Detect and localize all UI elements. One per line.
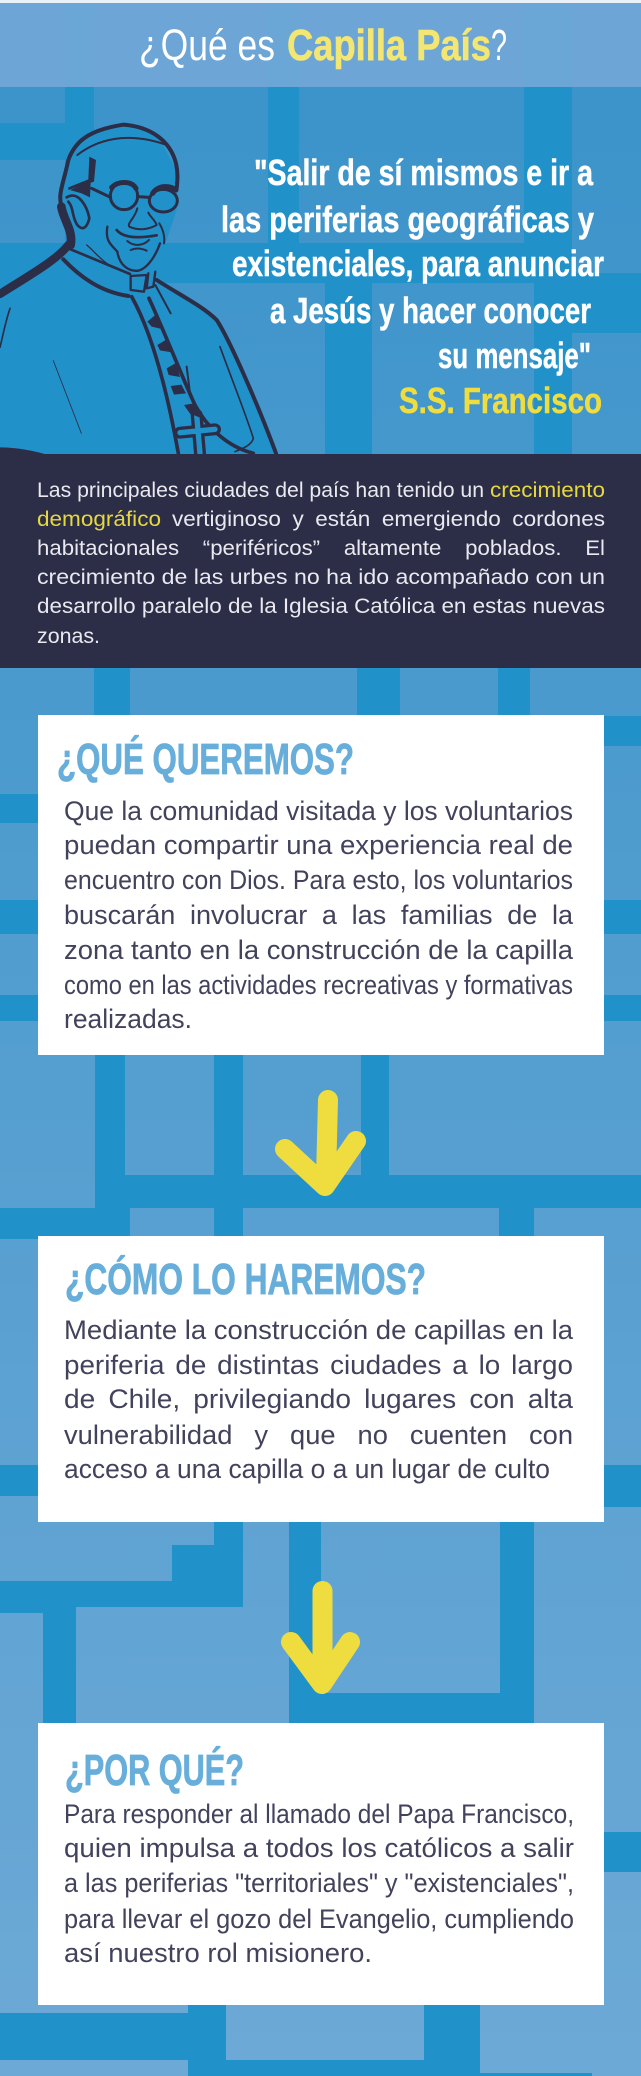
heading: ¿QUÉ QUEREMOS? xyxy=(57,734,354,784)
heading: ¿CÓMO LO HAREMOS? xyxy=(65,1254,426,1304)
body text xyxy=(64,796,573,1034)
body text xyxy=(64,1315,573,1484)
quote xyxy=(221,152,604,421)
arrow: down to por qué xyxy=(291,1591,350,1684)
body text: quien impulsa a todos los católicos a salir xyxy=(64,1833,574,1863)
illustration: Pope Francis portrait xyxy=(0,124,277,457)
body text: Para responder al llamado del Papa Francisco, xyxy=(64,1799,574,1829)
intro text: Las principales ciudades del país han tenido un xyxy=(37,478,484,502)
panel: qué queremos xyxy=(38,715,604,1055)
intro text: demográfico xyxy=(37,507,161,531)
intro text xyxy=(37,478,605,648)
body text: zona tanto en la construcción de la capilla xyxy=(64,935,573,965)
body text: puedan compartir una experiencia real de xyxy=(64,830,573,860)
body text: como en las actividades recreativas y formativas xyxy=(64,970,573,1000)
title: Capilla País xyxy=(287,21,491,70)
body text: realizadas. xyxy=(64,1004,192,1034)
intro text: zonas. xyxy=(37,624,100,648)
title: ? xyxy=(491,21,507,70)
panel: cómo lo haremos xyxy=(38,1236,604,1522)
arrow: down to cómo xyxy=(285,1100,356,1186)
body text: así nuestro rol misionero. xyxy=(64,1938,372,1968)
panel: intro dark band xyxy=(0,454,641,668)
body text: Mediante la construcción de capillas en la xyxy=(64,1315,573,1345)
title xyxy=(139,21,507,70)
body text: periferia de distintas ciudades a lo largo xyxy=(64,1350,573,1380)
body text xyxy=(64,1799,574,1968)
body text: acceso a una capilla o a un lugar de culto xyxy=(64,1454,550,1484)
intro text: desarrollo paralelo de la Iglesia Católica en estas nuevas xyxy=(37,594,605,618)
quote attribution: S.S. Francisco xyxy=(399,380,602,421)
header band xyxy=(0,0,641,87)
title: ¿Qué es xyxy=(139,21,275,70)
heading: ¿POR QUÉ? xyxy=(65,1745,244,1795)
body text: para llevar el gozo del Evangelio, cumpliendo xyxy=(64,1904,574,1934)
body text: vulnerabilidad y que no cuenten con xyxy=(64,1420,573,1450)
body text: a las periferias "territoriales" y "existenciales", xyxy=(64,1868,574,1898)
panel: por qué xyxy=(38,1723,604,2005)
body text: encuentro con Dios. Para esto, los voluntarios xyxy=(64,865,573,895)
body text: de Chile, privilegiando lugares con alta xyxy=(64,1384,573,1414)
body text: Que la comunidad visitada y los voluntarios xyxy=(64,796,573,826)
intro text: habitacionales “periféricos” altamente poblados. El xyxy=(37,536,605,560)
intro text: crecimiento xyxy=(490,478,605,502)
body text: buscarán involucrar a las familias de la xyxy=(64,900,573,930)
intro text: crecimiento de las urbes no ha ido acompañado con un xyxy=(37,565,605,589)
intro text: vertiginoso y están emergiendo cordones xyxy=(172,507,605,531)
